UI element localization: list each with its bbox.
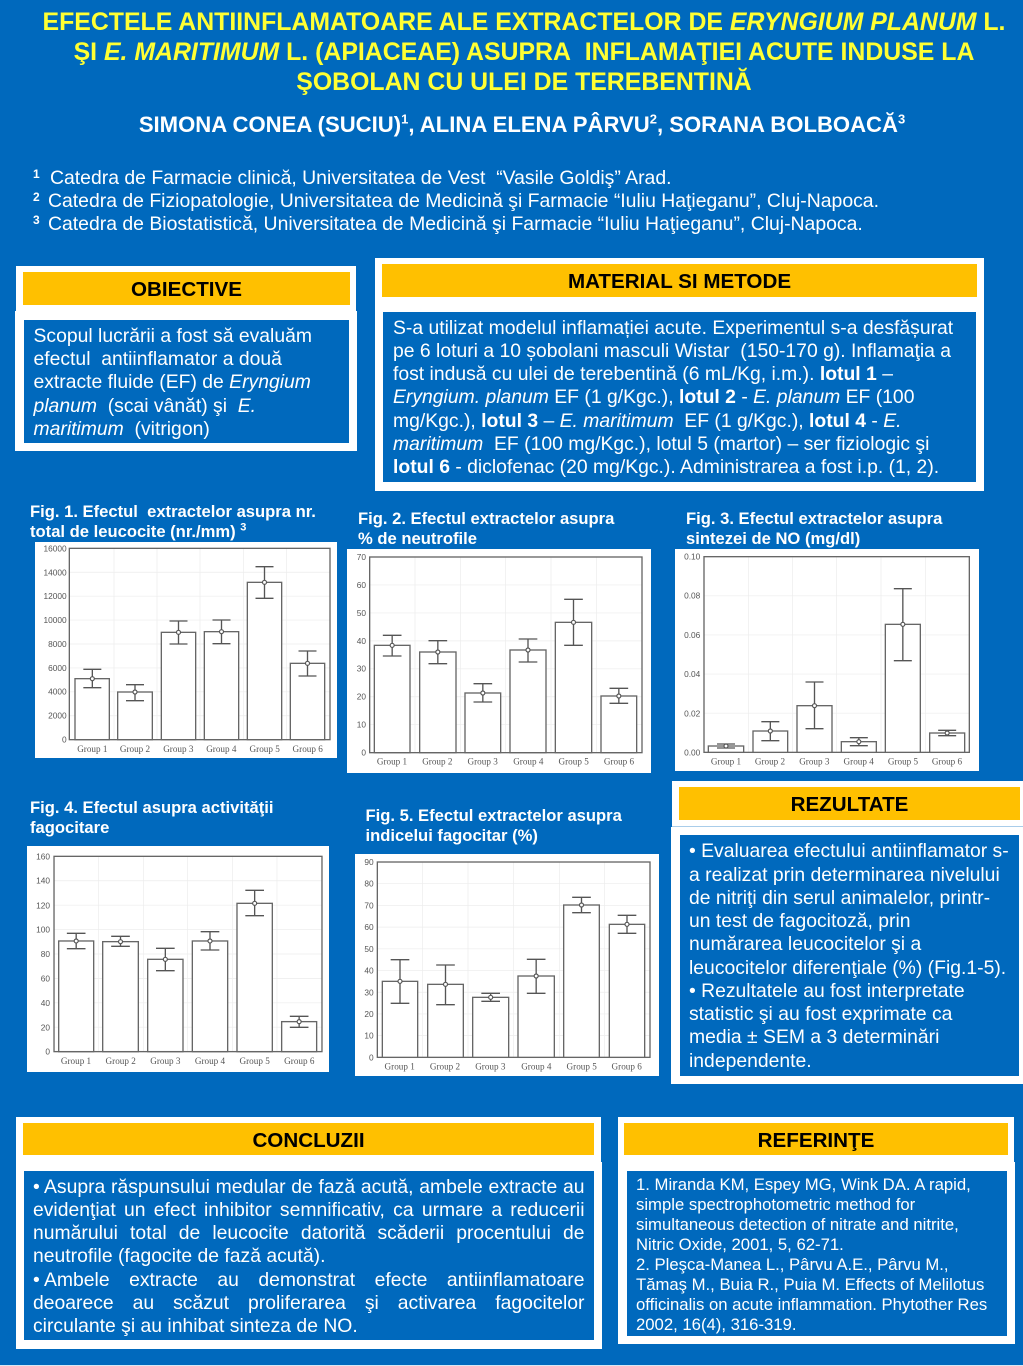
text: referinte: simultaneous detection of nitrate and nitrite, xyxy=(636,1215,959,1234)
text: referinte: Nitric Oxide, 2001, 5, 62-71. xyxy=(636,1235,844,1254)
text: material si metode: maritimum EF (100 mg/Kgc.), lotul 5 (martor) – ser fiziologic şi xyxy=(393,433,929,455)
heading: referinte: REFERINŢE xyxy=(758,1129,874,1152)
plot frame xyxy=(377,862,650,1057)
text: rezultate: statistic şi au fost exprimate ca xyxy=(689,1003,952,1025)
heading: objective: OBIECTIVE xyxy=(131,278,242,301)
y axis labels: 0.02 xyxy=(684,708,701,718)
y axis labels xyxy=(36,851,50,1057)
x axis labels: Group 6 xyxy=(604,757,634,767)
caption: figure 3 xyxy=(686,509,942,548)
text: objective: extracte fluide (EF) de Eryngium xyxy=(34,371,311,393)
text: objective: efectul antiinflamator a două xyxy=(34,348,282,370)
x axis labels: Group 2 xyxy=(430,1061,461,1071)
y axis labels: 70 xyxy=(356,552,366,562)
text: referinte: 2. Pleşca-Manea L., Pârvu A.E., Pârvu M., xyxy=(636,1255,949,1274)
text: rezultate: a realizat prin determinarea nivelului xyxy=(689,864,1000,886)
x axis labels: Group 2 xyxy=(422,757,453,767)
text: concluzii: • xyxy=(33,1269,40,1291)
y axis labels: 50 xyxy=(364,944,374,954)
text: concluzii: neutrofile (fagocite de fază acută). xyxy=(33,1245,325,1267)
x axis labels: Group 4 xyxy=(513,757,544,767)
x axis labels: Group 4 xyxy=(206,744,237,754)
text: rezultate: • Evaluarea efectului antiinflamator s- xyxy=(689,840,1009,862)
heading: concluzii xyxy=(23,1123,594,1155)
title: EFECTELE ANTIINFLAMATOARE ALE EXTRACTELOR DE ERYNGIUM PLANUM L. xyxy=(43,9,1005,36)
x axis labels: Group 5 xyxy=(567,1061,597,1071)
affiliations: Catedra de Fiziopatologie, Universitatea de Medicină şi Farmacie “Iuliu Haţieganu”, Cluj-Napoca. xyxy=(48,190,879,212)
y axis labels: 20 xyxy=(41,1022,50,1032)
x axis labels: Group 2 xyxy=(106,1056,136,1066)
plot frame xyxy=(704,557,969,752)
panel: material si metode xyxy=(375,258,984,491)
x axis labels: Group 2 xyxy=(755,757,786,767)
y axis labels: 0.00 xyxy=(684,747,701,757)
text: rezultate: numărarea leucocitelor şi a xyxy=(689,933,921,955)
y axis labels: 40 xyxy=(41,998,50,1008)
chart: figure 3 nitric oxide xyxy=(675,549,979,771)
text: referinte: simple spectrophotometric method for xyxy=(636,1195,915,1214)
caption: figure 5 xyxy=(366,806,622,845)
chart: figure 5 phagocytic index xyxy=(355,854,659,1076)
text: concluzii: numărului total de leucocite datorită scăderii procentului de xyxy=(33,1222,584,1244)
y axis labels: 20 xyxy=(364,1009,374,1019)
text: referinte: 1. Miranda KM, Espey MG, Wink DA. A rapid, xyxy=(636,1175,971,1194)
chart: figure 1 leukocytes xyxy=(35,542,337,758)
caption: figure 1 xyxy=(30,502,316,540)
y axis labels: 0 xyxy=(369,1052,374,1062)
affiliations: 1 xyxy=(33,167,40,181)
x axis labels: Group 1 xyxy=(711,757,742,767)
x axis labels xyxy=(61,1056,315,1066)
text: rezultate: independente. xyxy=(689,1050,812,1072)
y axis labels xyxy=(43,543,67,744)
y axis labels: 2000 xyxy=(48,710,67,720)
text: referinte xyxy=(626,1171,1007,1336)
x axis labels: Group 6 xyxy=(293,744,323,754)
y axis labels: 16000 xyxy=(43,543,67,553)
heading: rezultate: REZULTATE xyxy=(791,793,908,816)
text: concluzii: Asupra răspunsului medular de fază acută, ambele extracte au xyxy=(44,1176,584,1198)
text: material si metode xyxy=(382,312,976,482)
y axis labels: 70 xyxy=(364,900,374,910)
text: material si metode: pe 6 loturi a 10 șobolani masculi Wistar (150-170 g). Inflamaţia a xyxy=(393,340,951,362)
caption: figure 4: Fig. 4. Efectul asupra activităţii xyxy=(30,798,273,817)
title: ŞOBOLAN CU ULEI DE TEREBENTINĂ xyxy=(296,69,752,96)
x axis labels: Group 3 xyxy=(799,757,830,767)
y axis labels: 140 xyxy=(36,876,50,886)
text: concluzii: evidenţiat un efect inhibitor semnificativ, ca urmare a reducerii xyxy=(33,1199,584,1221)
y axis labels: 30 xyxy=(356,664,366,674)
panel: concluzii xyxy=(16,1117,602,1349)
heading: material si metode xyxy=(382,264,977,297)
text: rezultate xyxy=(680,835,1019,1076)
text: objective: planum (scai vânăt) şi E. xyxy=(34,395,256,417)
text: objective: Scopul lucrării a fost să evaluăm xyxy=(34,325,312,347)
text: referinte: 2002, 16(4), 316-319. xyxy=(636,1315,797,1334)
chart: figure 2 neutrophils xyxy=(347,549,651,773)
y axis labels: 40 xyxy=(356,636,366,646)
caption: figure 4: fagocitare xyxy=(30,818,109,837)
text: objective xyxy=(24,320,349,442)
caption: figure 3: sintezei de NO (mg/dl) xyxy=(686,529,860,548)
caption: figure 3: Fig. 3. Efectul extractelor asupra xyxy=(686,509,942,528)
affiliations xyxy=(33,167,879,235)
x axis labels: Group 5 xyxy=(888,757,919,767)
text: rezultate: un test de fagocitoză, prin xyxy=(689,910,911,932)
text: objective: maritimum (vitrigon) xyxy=(34,418,210,440)
y axis labels: 80 xyxy=(41,949,50,959)
y axis labels: 4000 xyxy=(48,686,67,696)
x axis labels: Group 3 xyxy=(163,744,194,754)
y axis labels: 20 xyxy=(356,692,366,702)
y axis labels: 12000 xyxy=(43,591,67,601)
x axis labels: Group 5 xyxy=(250,744,280,754)
y axis labels: 10000 xyxy=(43,615,67,625)
y axis labels: 30 xyxy=(364,987,374,997)
x axis labels: Group 1 xyxy=(385,1061,415,1071)
text: concluzii: circulante şi au inhibat sinteza de NO. xyxy=(33,1315,358,1337)
y axis labels: 60 xyxy=(364,922,374,932)
title: ŞI E. MARITIMUM L. (APIACEAE) ASUPRA INFLAMAŢIEI ACUTE INDUSE LA xyxy=(74,39,974,66)
y axis labels: 0.04 xyxy=(684,669,701,679)
panel: referinte xyxy=(618,1117,1015,1344)
text: rezultate: de nitriţi din serul animalelor, printr- xyxy=(689,887,990,909)
y axis labels xyxy=(364,857,374,1062)
text: referinte: officinalis on acute inflammation. Phytother Res xyxy=(636,1295,987,1314)
panel: rezultate xyxy=(671,781,1023,1084)
caption: figure 1: total de leucocite (nr./mm) 3 xyxy=(30,521,246,540)
x axis labels: Group 4 xyxy=(521,1061,552,1071)
x axis labels: Group 3 xyxy=(467,757,498,767)
x axis labels: Group 3 xyxy=(150,1056,181,1066)
text: rezultate: leucocitelor diferenţiale (%) (Fig.1-5). xyxy=(689,957,1006,979)
x axis labels: Group 4 xyxy=(844,757,874,767)
x axis labels xyxy=(77,744,323,754)
x axis labels: Group 1 xyxy=(61,1056,92,1066)
caption: figure 1: Fig. 1. Efectul extractelor asupra nr. xyxy=(30,502,316,520)
x axis labels: Group 3 xyxy=(475,1061,506,1071)
x axis labels: Group 5 xyxy=(240,1056,270,1066)
x axis labels: Group 6 xyxy=(612,1061,642,1071)
y axis labels: 80 xyxy=(364,879,374,889)
text: material si metode: S-a utilizat modelul inflamației acute. Experimentul s-a desfășurat xyxy=(393,317,953,339)
text: rezultate: • Rezultatele au fost interpretate xyxy=(689,980,965,1002)
y axis labels: 10 xyxy=(356,720,366,730)
text: material si metode: lotul 6 - diclofenac (20 mg/Kgc.). Administrarea a fost i.p. (1, 2). xyxy=(393,456,939,478)
affiliations: 3 xyxy=(33,213,40,227)
affiliations: Catedra de Farmacie clinică, Universitatea de Vest “Vasile Goldiş” Arad. xyxy=(50,167,672,189)
text: concluzii: Ambele extracte au demonstrat efecte antiinflamatoare xyxy=(44,1269,584,1291)
y axis labels: 0 xyxy=(62,734,67,744)
y axis labels: 60 xyxy=(41,973,50,983)
plot frame xyxy=(54,856,322,1052)
caption: figure 2: Fig. 2. Efectul extractelor asupra xyxy=(358,509,614,528)
affiliations: Catedra de Biostatistică, Universitatea de Medicină şi Farmacie “Iuliu Haţieganu”, Cluj-Napoca. xyxy=(48,213,863,235)
heading: concluzii: CONCLUZII xyxy=(252,1129,365,1152)
heading: objective xyxy=(23,272,350,304)
x axis labels xyxy=(377,757,634,767)
caption: figure 5: indicelui fagocitar (%) xyxy=(366,826,538,845)
bars with error bars xyxy=(374,600,636,753)
authors: SIMONA CONEA (SUCIU)1, ALINA ELENA PÂRVU2, SORANA BOLBOACĂ3 xyxy=(139,111,905,136)
bars with error bars xyxy=(75,566,325,739)
y axis labels: 0.06 xyxy=(684,630,701,640)
text: material si metode: Eryngium. planum EF (1 g/Kgc.), lotul 2 - E. planum EF (100 xyxy=(393,386,914,408)
title xyxy=(43,9,1005,96)
y axis labels xyxy=(356,552,366,758)
text: concluzii xyxy=(24,1171,594,1340)
text: concluzii: deoarece au scăzut proliferarea şi activarea fagocitelor xyxy=(33,1292,584,1314)
affiliations: 2 xyxy=(33,190,40,204)
x axis labels: Group 6 xyxy=(284,1056,315,1066)
y axis labels: 0.10 xyxy=(684,552,701,562)
x axis labels: Group 1 xyxy=(377,757,407,767)
y axis labels: 0.08 xyxy=(684,591,701,601)
text: concluzii: • xyxy=(33,1176,40,1198)
y axis labels: 120 xyxy=(36,900,50,910)
y axis labels: 8000 xyxy=(48,639,67,649)
x axis labels xyxy=(385,1061,642,1071)
x axis labels: Group 1 xyxy=(77,744,108,754)
y axis labels: 10 xyxy=(364,1031,374,1041)
x axis labels: Group 5 xyxy=(558,757,589,767)
text: material si metode: fost indusă cu ulei de terebentină (6 mL/Kg, i.m.). lotul 1 – xyxy=(393,363,893,385)
y axis labels: 60 xyxy=(356,580,366,590)
caption: figure 4 xyxy=(30,798,273,837)
bars with error bars xyxy=(59,890,317,1052)
heading: referinte xyxy=(624,1123,1008,1155)
text: referinte: Tămaş M., Buia R., Puia M. Effects of Melilotus xyxy=(636,1275,984,1294)
y axis labels: 90 xyxy=(364,857,374,867)
plot frame xyxy=(69,548,330,739)
caption: figure 5: Fig. 5. Efectul extractelor asupra xyxy=(366,806,622,825)
panel: objective xyxy=(15,266,357,451)
x axis labels: Group 4 xyxy=(195,1056,226,1066)
x axis labels xyxy=(711,757,963,767)
caption: figure 2 xyxy=(358,509,614,548)
caption: figure 2: % de neutrofile xyxy=(358,529,477,548)
y axis labels xyxy=(684,552,701,757)
text: rezultate: media ± SEM a 3 determinări xyxy=(689,1026,939,1048)
x axis labels: Group 2 xyxy=(120,744,151,754)
heading: material si metode: MATERIAL SI METODE xyxy=(568,270,791,293)
y axis labels: 6000 xyxy=(48,663,67,673)
y axis labels: 0 xyxy=(361,748,366,758)
x axis labels: Group 6 xyxy=(932,757,963,767)
y axis labels: 0 xyxy=(45,1047,50,1057)
y axis labels: 50 xyxy=(356,608,366,618)
heading: rezultate xyxy=(679,787,1020,820)
y axis labels: 160 xyxy=(36,851,50,861)
chart: figure 4 phagocytic activity xyxy=(27,846,329,1072)
y axis labels: 100 xyxy=(36,925,50,935)
bars with error bars xyxy=(708,589,965,752)
y axis labels: 14000 xyxy=(43,567,67,577)
bars with error bars xyxy=(382,897,645,1057)
text: material si metode: mg/Kgc.), lotul 3 – E. maritimum EF (1 g/Kgc.), lotul 4 - E. xyxy=(393,410,901,432)
plot frame xyxy=(369,557,642,753)
y axis labels: 40 xyxy=(364,966,374,976)
